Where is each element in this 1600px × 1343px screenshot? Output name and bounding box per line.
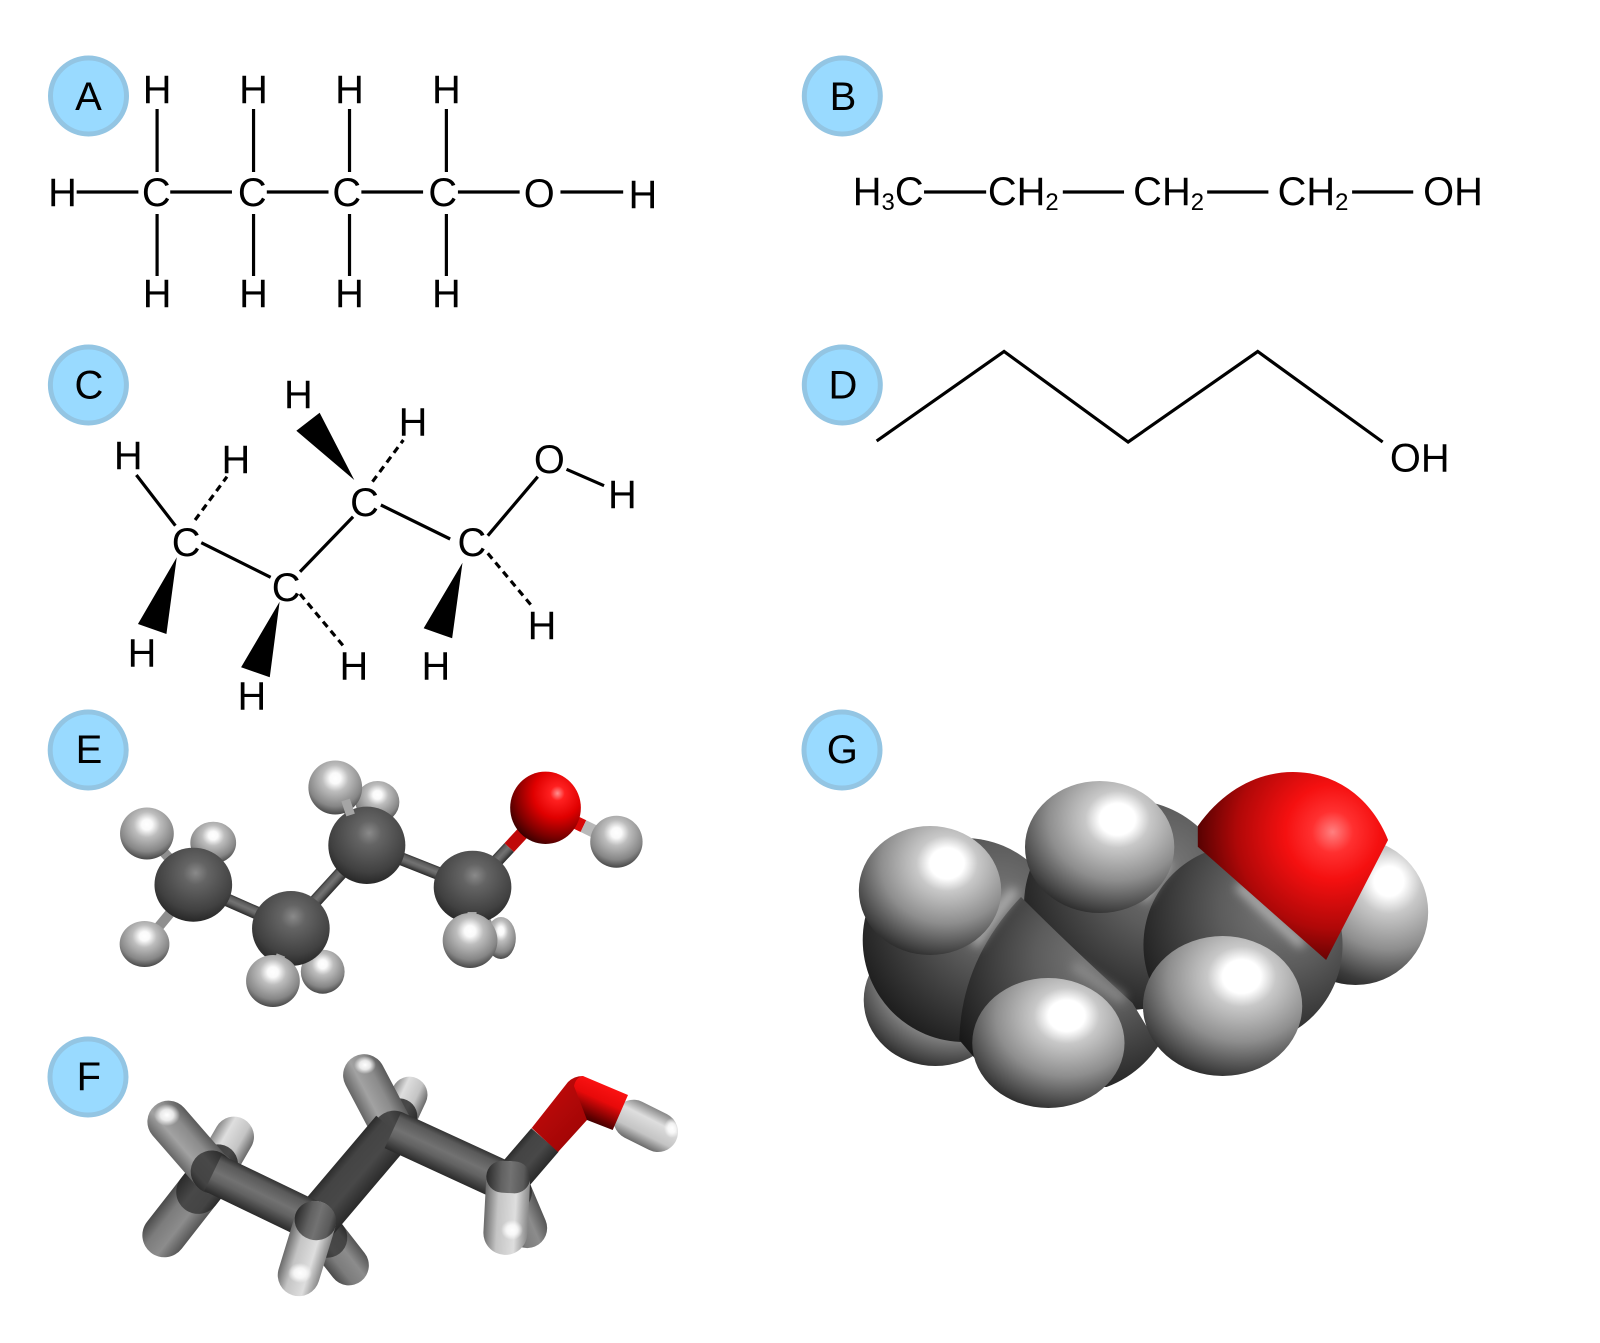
atom labels C: C <box>350 481 379 525</box>
atom labels A: O <box>524 172 555 216</box>
panel C: stereo wedge-dash formula <box>50 347 637 719</box>
dashed bonds C <box>195 440 534 648</box>
badge G: G <box>827 728 858 772</box>
formula text B: H <box>853 170 882 214</box>
badge E <box>50 712 126 788</box>
atom labels A: C <box>332 171 361 215</box>
badge F <box>50 1039 126 1115</box>
atom labels C: H <box>608 473 637 517</box>
hydroxyl label D: OH <box>1390 437 1450 481</box>
formula text B: OH <box>1423 170 1483 214</box>
space-filling molecule <box>859 772 1428 1108</box>
formula text B: 2 <box>1045 189 1059 216</box>
ball-and-stick molecule <box>120 760 643 1007</box>
bonds A <box>77 109 623 276</box>
bonds B <box>924 190 1413 194</box>
formula text B: CH <box>1133 170 1191 214</box>
panel B: condensed formula <box>804 58 1483 216</box>
badge B <box>804 58 880 134</box>
atom labels C: C <box>457 521 486 565</box>
atom labels C: H <box>422 644 450 689</box>
formula text B: 2 <box>1335 189 1348 216</box>
solid bonds C <box>136 469 604 577</box>
formula text B: CH <box>988 170 1045 214</box>
atom labels C: H <box>399 400 427 445</box>
atom labels A: H <box>432 68 461 112</box>
atom labels A: C <box>142 171 171 215</box>
atom labels A: H <box>239 272 268 316</box>
formula text B: 2 <box>1191 189 1204 216</box>
atom labels A: H <box>239 68 268 112</box>
wedge bonds C <box>138 413 462 677</box>
panel F: stick model <box>50 1039 685 1301</box>
formula text B <box>853 170 1483 216</box>
badge D <box>804 347 880 423</box>
panel A: full structural formula <box>48 58 657 316</box>
badge E: E <box>76 728 102 772</box>
formula text B: 3 <box>882 189 895 216</box>
formula text B: C <box>895 170 924 214</box>
atom labels C: H <box>222 438 250 482</box>
atom labels A: H <box>143 272 171 316</box>
atom labels C: H <box>528 604 556 648</box>
atom labels C: H <box>128 631 156 676</box>
badge F: F <box>77 1055 101 1099</box>
formula text B: CH <box>1278 170 1335 214</box>
atom labels C: H <box>114 434 143 478</box>
atom labels A: H <box>629 173 657 217</box>
stick molecule <box>133 1047 685 1301</box>
badge A <box>50 58 126 134</box>
atom labels A: C <box>238 171 267 215</box>
carbon skeleton D <box>877 352 1383 442</box>
badge A: A <box>75 75 102 119</box>
atom labels A <box>48 68 657 316</box>
atom labels C: C <box>172 521 201 565</box>
atom labels C: O <box>534 438 565 482</box>
atom labels A: H <box>335 68 364 112</box>
badge G <box>804 712 880 788</box>
badge C: C <box>75 364 103 408</box>
atom labels C: H <box>237 674 266 719</box>
atom labels A: C <box>428 171 457 215</box>
badge B: B <box>830 75 856 119</box>
atom labels C: H <box>339 644 368 689</box>
atom labels A: H <box>143 68 171 112</box>
atom labels A: H <box>48 171 77 215</box>
atom labels C: C <box>272 566 300 610</box>
panel G: space-filling model <box>804 712 1428 1108</box>
badge D: D <box>829 364 857 408</box>
atom labels A: H <box>432 272 461 316</box>
panel D: skeletal formula <box>804 347 1450 481</box>
panel E: ball-and-stick model <box>50 712 643 1007</box>
atom labels C <box>114 373 637 719</box>
badge C <box>50 347 126 423</box>
atom labels A: H <box>335 272 364 316</box>
atom labels C: H <box>284 373 313 417</box>
